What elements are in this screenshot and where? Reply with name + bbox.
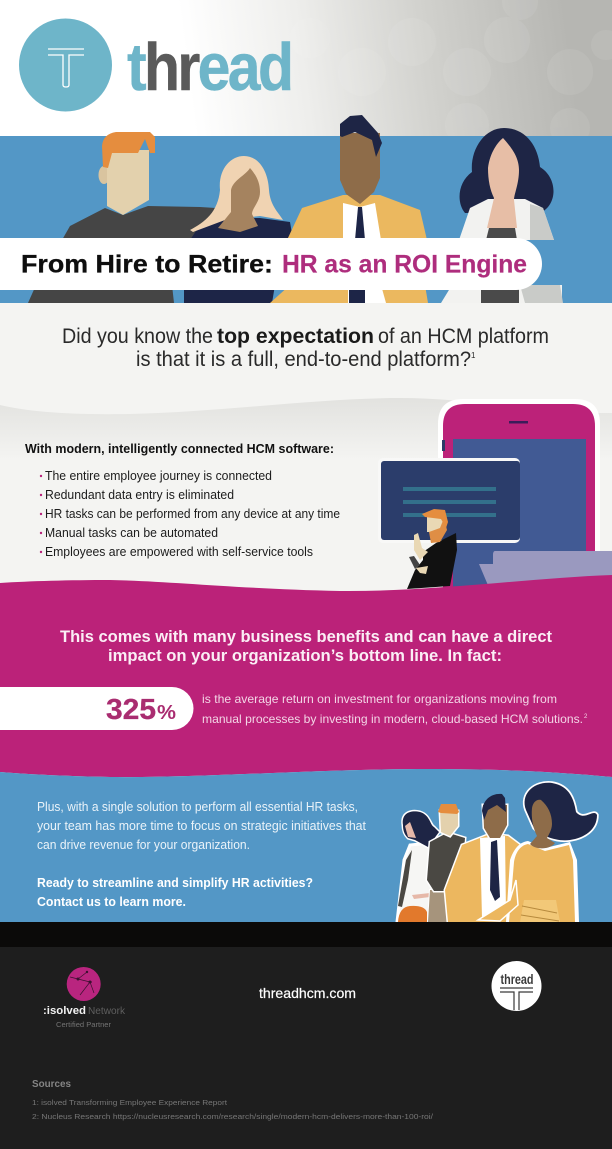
- list: software benefits: HR tasks can be performed from any device at any time: [45, 507, 340, 521]
- logo: isolved network certified partner: Network: [88, 1005, 126, 1017]
- logo: isolved network certified partner: Certified Partner: [56, 1020, 112, 1029]
- stat description: is the average return on investment for organizations moving from: [202, 692, 557, 706]
- intro question text: top expectation: [217, 324, 374, 348]
- stat pill: 325%: [0, 687, 194, 730]
- sources list: [32, 1098, 434, 1121]
- illustration: four professionals: [28, 115, 563, 303]
- small man with phone: [407, 509, 457, 589]
- panel: header: [0, 0, 612, 148]
- intro question text: is that it is a full, end-to-end platform?: [136, 347, 471, 371]
- panel: hero blue band: [0, 136, 612, 303]
- stat pill: 325%: %: [157, 702, 176, 724]
- title: from hire to retire: From Hire to Retire:: [21, 250, 273, 278]
- list: software benefits: Manual tasks can be automated: [45, 526, 218, 540]
- intro question text: Did you know the: [62, 324, 213, 348]
- heading: business benefits: impact on your organization’s bottom line. In fact:: [108, 647, 502, 665]
- title banner: [0, 238, 542, 290]
- website link: threadhcm.com: [259, 985, 356, 1001]
- intro question text: [62, 324, 549, 371]
- text block: closing paragraph: can drive revenue for your organization.: [37, 838, 250, 852]
- title: roi engine: HR as an ROI Engine: [282, 250, 527, 278]
- list: software benefits: [40, 469, 340, 559]
- sources heading: Sources: [32, 1079, 71, 1090]
- panel: blue closing section: [0, 769, 612, 922]
- list: software benefits: Employees are empowered with self-service tools: [45, 545, 313, 559]
- illustration: phone with man: [378, 399, 612, 596]
- heading: business benefits: [60, 628, 553, 665]
- icon: magenta network brain: [67, 967, 101, 1001]
- list: software benefits: The entire employee journey is connected: [45, 469, 272, 483]
- call to action: Ready to streamline and simplify HR activities?: [37, 876, 313, 890]
- logo: thread white badge: thread: [500, 971, 534, 987]
- illustration: team of four: [397, 783, 597, 922]
- call to action: Contact us to learn more.: [37, 895, 186, 909]
- call to action: [37, 876, 313, 909]
- bokeh background circles: [290, 0, 612, 148]
- stat description: manual processes by investing in modern, cloud-based HCM solutions.: [202, 712, 583, 726]
- figure: man in yellow jacket: [270, 115, 428, 303]
- message card: [378, 458, 520, 543]
- logo: isolved network certified partner: [43, 967, 126, 1029]
- figure: man with orange hair: [28, 132, 216, 303]
- stat description: 2: [584, 714, 588, 720]
- text block: closing paragraph: Plus, with a single solution to perform all essential HR tasks,: [37, 800, 358, 814]
- intro question text: 1: [471, 351, 476, 360]
- figure: man with sweater: [427, 804, 465, 922]
- panel: magenta benefits section: [0, 575, 612, 777]
- sources list: 1: isolved Transforming Employee Experience Report: [32, 1098, 228, 1107]
- panel: footer: [0, 947, 612, 1149]
- stat pill: 325%: 325: [106, 694, 156, 726]
- phone: [438, 399, 600, 596]
- figure: woman at left: [397, 811, 439, 922]
- laptop: [479, 551, 612, 590]
- panel: wavy light section: [0, 398, 612, 460]
- text block: software heading: With modern, intelligently connected HCM software:: [25, 442, 334, 456]
- figure: man in jacket: [445, 794, 520, 922]
- stat description: [202, 692, 588, 726]
- text block: closing paragraph: [37, 800, 367, 852]
- panel: black strip: [0, 922, 612, 947]
- logo: thread wordmark: thread: [127, 31, 291, 105]
- figure: woman with dark hair: [441, 128, 563, 303]
- list: software benefits: Redundant data entry is eliminated: [45, 488, 234, 502]
- sources list: 2: Nucleus Research https://nucleusresearch.com/research/single/modern-hcm-delivers-more-than-100-roi/: [32, 1112, 434, 1121]
- logo: isolved network certified partner: :isolved: [43, 1005, 86, 1017]
- figure: woman in yellow dress: [478, 783, 597, 922]
- figure: blonde woman: [184, 156, 293, 303]
- logo: thread circle: [19, 18, 112, 112]
- text block: closing paragraph: your team has more time to focus on strategic initiatives that: [37, 819, 367, 833]
- heading: business benefits: This comes with many business benefits and can have a direct: [60, 628, 553, 646]
- intro question text: of an HCM platform: [378, 324, 549, 348]
- logo: thread white badge: [492, 961, 542, 1011]
